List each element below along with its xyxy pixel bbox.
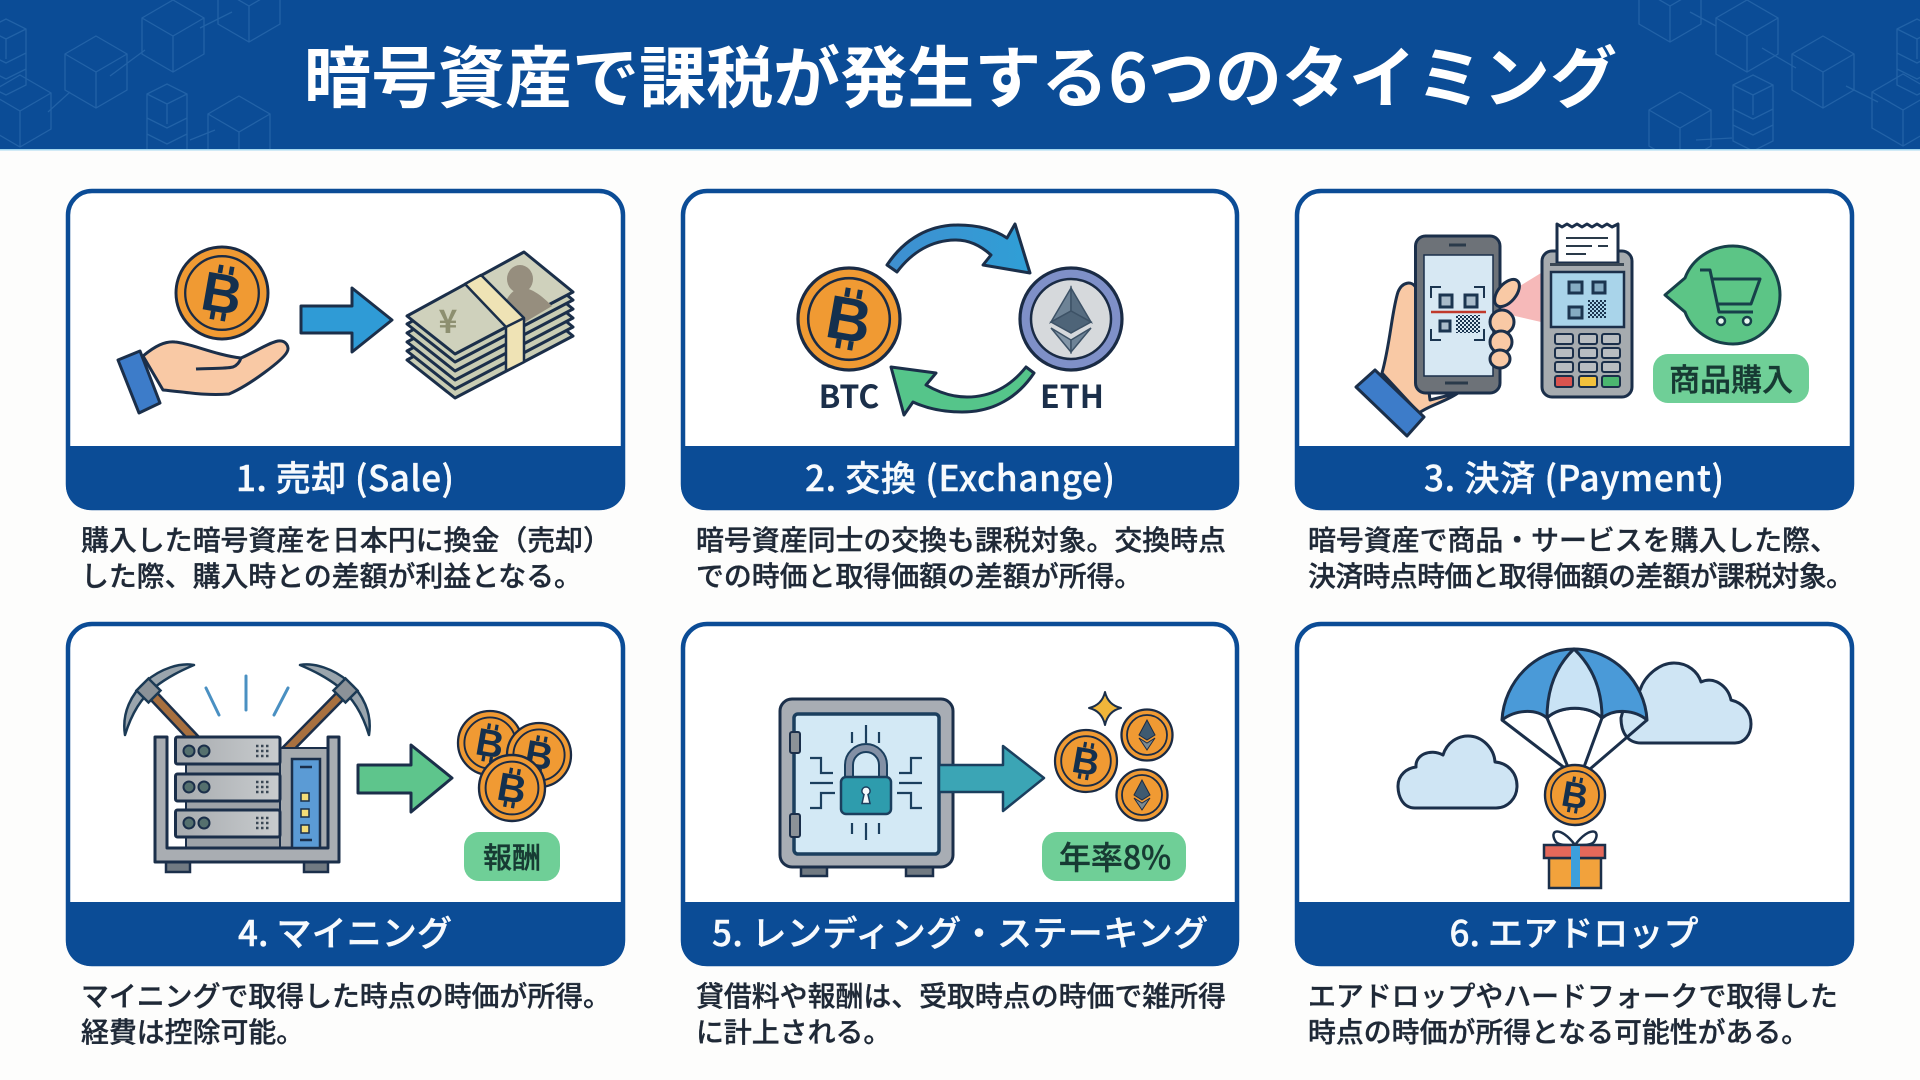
header banner — [0, 0, 1920, 168]
icon: bitcoin reward coins: B — [472, 720, 507, 768]
description: mining: 経費は控除可能。 — [81, 1011, 304, 1051]
icon: bitcoin reward coins — [458, 711, 571, 821]
icon: bitcoin coin — [798, 268, 900, 370]
icon: bitcoin coin — [176, 247, 268, 339]
icon: payment terminal — [1542, 224, 1632, 397]
description: lending — [696, 975, 1226, 1051]
heading bar: mining — [66, 902, 625, 966]
icon: bitcoin coin: B — [197, 259, 247, 327]
panel: 3 payment — [1295, 191, 1854, 595]
icon: bitcoin reward coins: B — [521, 732, 556, 780]
icon: gift box — [1544, 831, 1605, 888]
description: payment: 暗号資産で商品・サービスを購入した際、 — [1308, 519, 1838, 559]
heading bar: sale — [66, 446, 625, 510]
heading bar: exchange — [681, 446, 1239, 510]
heading bar: airdrop: 6. エアドロップ — [1450, 906, 1698, 957]
heading bar: mining: 4. マイニング — [238, 906, 452, 957]
description: mining — [81, 975, 611, 1051]
panel: 5 lending and staking — [681, 624, 1239, 1051]
description: sale — [81, 519, 611, 595]
title: 暗号資産で課税が発生する6つのタイミング — [304, 25, 1617, 122]
badge: reward: 報酬 — [483, 835, 541, 877]
icon: left cloud — [1398, 736, 1517, 808]
icon: scan beam — [1502, 273, 1541, 322]
icon: bitcoin coin: B — [821, 282, 877, 357]
icon: bitcoin coin — [1545, 765, 1605, 825]
panel: 4 mining — [66, 624, 625, 1051]
icon: open hand — [118, 341, 288, 413]
icon: spark lines — [206, 676, 288, 715]
heading bar: exchange: 2. 交換 (Exchange) — [805, 451, 1115, 502]
description: airdrop: 時点の時価が所得となる可能性がある。 — [1308, 1011, 1809, 1051]
description: lending: 貸借料や報酬は、受取時点の時価で雑所得 — [696, 975, 1226, 1015]
panel: 2 exchange — [681, 191, 1239, 595]
description: airdrop: エアドロップやハードフォークで取得した — [1308, 975, 1838, 1015]
arrow: mining — [358, 745, 452, 812]
icon: ethereum coin — [1020, 268, 1122, 370]
heading bar: payment: 3. 決済 (Payment) — [1424, 451, 1724, 502]
label: BTC: BTC — [819, 372, 879, 418]
badge: product purchase: 商品購入 — [1669, 355, 1793, 400]
heading bar: payment — [1295, 446, 1854, 510]
label: ETH: ETH — [1040, 372, 1104, 418]
description: mining: マイニングで取得した時点の時価が所得。 — [81, 975, 611, 1015]
description: exchange — [696, 519, 1226, 595]
arrow: btc to eth — [887, 224, 1030, 273]
description: exchange: 暗号資産同士の交換も課税対象。交換時点 — [696, 519, 1226, 559]
icon: digital safe — [780, 699, 953, 876]
icon: sparkle — [1089, 692, 1121, 725]
icon: yen banknote stack: ¥ — [439, 297, 458, 343]
badge: annual rate 8%: 年率8% — [1059, 833, 1171, 879]
description: sale: 購入した暗号資産を日本円に換金（売却） — [81, 519, 611, 559]
icon: reward coins — [1055, 710, 1172, 820]
icon: bitcoin coin: B — [1559, 773, 1591, 818]
panel: 6 airdrop — [1295, 624, 1854, 1051]
icon: shopping cart bubble — [1665, 246, 1780, 344]
description: exchange: での時価と取得価額の差額が所得。 — [696, 555, 1142, 595]
panel: 1 sale — [66, 191, 625, 595]
icon: pickaxes — [124, 664, 370, 752]
arrow: safe to coins — [939, 746, 1044, 811]
description: payment — [1308, 519, 1854, 595]
arrow: eth to btc — [891, 367, 1034, 415]
description: airdrop — [1308, 975, 1838, 1051]
description: lending: に計上される。 — [696, 1011, 891, 1051]
icon: bitcoin reward coins: B — [494, 765, 530, 813]
description: sale: した際、購入時との差額が利益となる。 — [81, 555, 582, 595]
icon: parachute — [1502, 649, 1647, 769]
icon: hand holding phone — [1356, 236, 1524, 436]
heading bar: sale: 1. 売却 (Sale) — [236, 451, 454, 502]
badge: reward — [464, 832, 560, 881]
icon: mining server rack — [155, 737, 339, 872]
arrow: sale — [301, 288, 392, 352]
icon: yen banknote stack — [407, 252, 573, 398]
heading bar: lending: 5. レンディング・ステーキング — [712, 906, 1208, 957]
header blockchain pattern — [0, 0, 1920, 149]
description: payment: 決済時点時価と取得価額の差額が課税対象。 — [1308, 555, 1854, 595]
icon: right cloud — [1621, 663, 1751, 743]
icon: reward coins: B — [1069, 738, 1103, 784]
heading bar: airdrop — [1295, 902, 1854, 966]
